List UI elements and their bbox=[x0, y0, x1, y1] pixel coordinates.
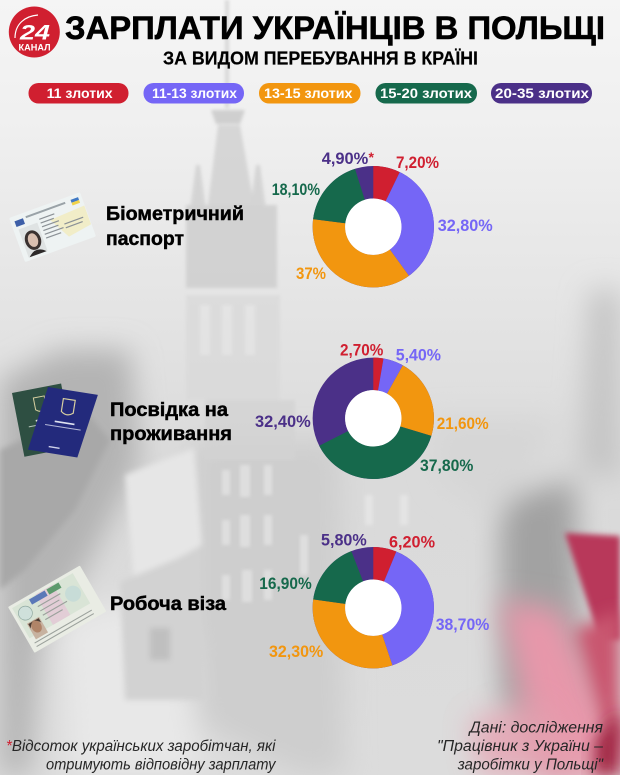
legend item: 13-15 злотих: 13-15 злотих bbox=[264, 85, 353, 101]
value labels: 21,60% bbox=[437, 415, 489, 433]
value labels bbox=[259, 532, 490, 661]
value labels bbox=[255, 342, 489, 475]
label: residence permit: Посвідка на bbox=[110, 400, 228, 421]
value labels: 5,40% bbox=[396, 347, 441, 365]
logo: 24 канал bbox=[9, 6, 60, 58]
polish flag tint bbox=[470, 533, 620, 775]
legend item: 13-15 злотих bbox=[259, 83, 360, 104]
footnote: *Відсоток українських заробітчан, які bbox=[6, 738, 276, 755]
church building windows bbox=[222, 465, 408, 602]
legend item: 11-13 злотих: 11-13 злотих bbox=[152, 85, 237, 101]
donut chart: residence permit bbox=[255, 342, 489, 475]
subtitle: ЗА ВИДОМ ПЕРЕБУВАННЯ В КРАЇНІ bbox=[163, 48, 478, 68]
donut chart: biometric passport bbox=[272, 149, 493, 283]
icon: biometric passport card bbox=[9, 192, 96, 262]
value labels: 32,40% bbox=[255, 413, 311, 431]
value labels: 6,20% bbox=[389, 533, 435, 551]
value labels: 4,90% bbox=[322, 150, 369, 168]
title: ЗАРПЛАТИ УКРАЇНЦІВ В ПОЛЬЩІ bbox=[65, 10, 605, 46]
logo: 24 канал: КАНАЛ bbox=[18, 42, 50, 52]
label: biometric passport bbox=[106, 204, 244, 250]
footnote bbox=[6, 738, 277, 774]
value labels: 5,80% bbox=[321, 532, 367, 550]
legend item: 15-20 злотих: 15-20 злотих bbox=[380, 85, 472, 101]
label: residence permit: проживання bbox=[110, 424, 232, 445]
source note: Дані: дослідження bbox=[468, 720, 603, 736]
legend bbox=[28, 83, 592, 104]
label: work visa: Робоча віза bbox=[110, 594, 226, 615]
icon: residence permit booklets bbox=[12, 383, 98, 459]
source note: заробітки у Польщі" bbox=[457, 756, 604, 774]
blue booklet bbox=[28, 385, 98, 459]
value labels: 7,20% bbox=[396, 154, 439, 172]
legend item: 11-13 злотих bbox=[144, 83, 244, 104]
value labels: 32,80% bbox=[438, 217, 493, 235]
legend item: 15-20 злотих bbox=[376, 83, 477, 104]
logo: 24 канал: 24 bbox=[19, 22, 50, 44]
value labels: 16,90% bbox=[259, 575, 312, 593]
source note bbox=[437, 720, 604, 774]
label: biometric passport: Біометричний bbox=[106, 204, 244, 225]
label: biometric passport: паспорт bbox=[106, 229, 184, 250]
value labels: 37% bbox=[296, 265, 326, 283]
source note: "Працівник з України – bbox=[437, 738, 603, 755]
value labels: 38,70% bbox=[436, 616, 490, 634]
value labels bbox=[272, 149, 493, 283]
value labels: 18,10% bbox=[272, 181, 320, 199]
donut chart: work visa bbox=[259, 532, 490, 661]
value labels: 2,70% bbox=[340, 342, 384, 360]
cathedral tower bbox=[186, 0, 295, 460]
footnote: отримують відповідну зарплату bbox=[46, 756, 277, 774]
legend item: 11 злотих: 11 злотих bbox=[47, 85, 113, 101]
legend item: 20-35 злотих: 20-35 злотих bbox=[495, 85, 589, 101]
value labels: 32,30% bbox=[269, 643, 324, 661]
legend item: 20-35 злотих bbox=[491, 83, 592, 104]
label: residence permit bbox=[110, 400, 232, 445]
legend item: 11 злотих bbox=[28, 83, 128, 104]
green booklet bbox=[12, 383, 73, 457]
icon: work visa bbox=[8, 566, 106, 653]
value labels: 37,80% bbox=[420, 457, 474, 475]
value labels: * bbox=[368, 149, 374, 165]
